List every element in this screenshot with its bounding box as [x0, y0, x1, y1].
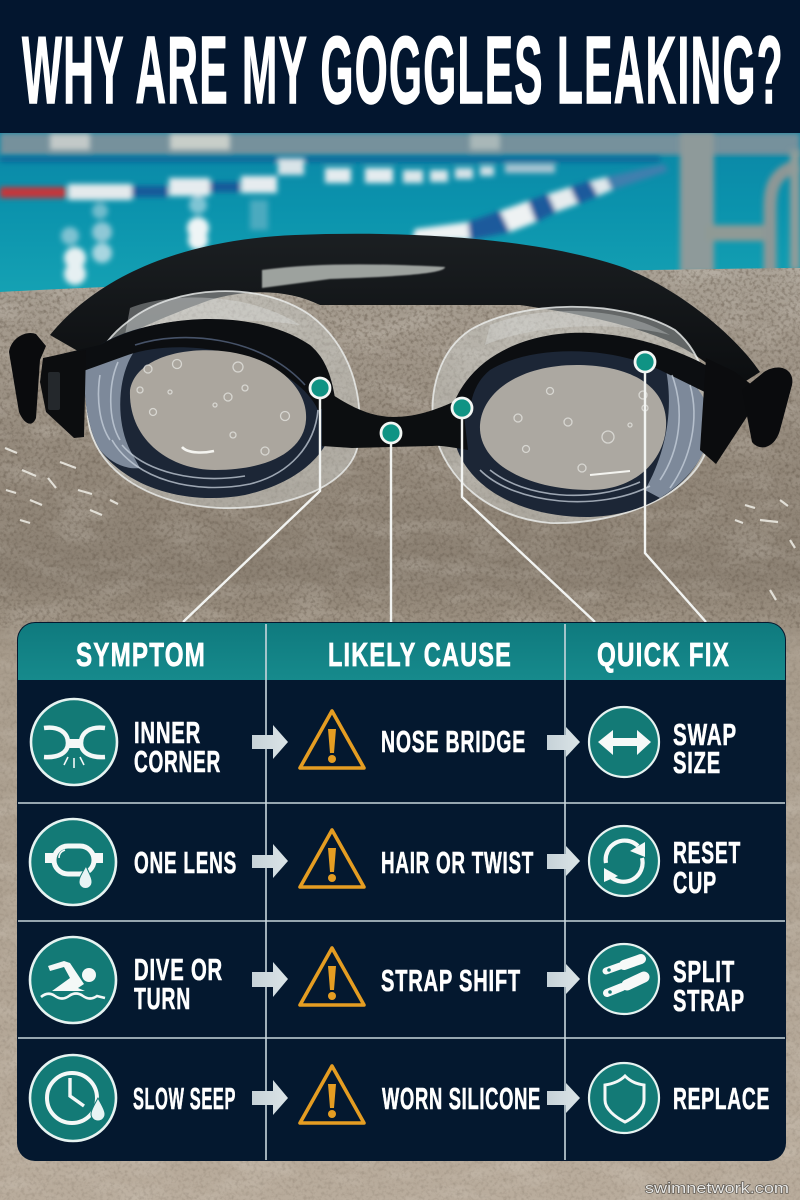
lane rope	[412, 164, 668, 240]
left buckle	[9, 333, 86, 438]
heading: symptom: SYMPTOM	[76, 636, 206, 673]
right lens	[432, 307, 735, 523]
icon: warning	[300, 830, 364, 887]
arrow	[252, 1080, 288, 1115]
right buckle	[700, 358, 792, 464]
text: dive or turn	[134, 952, 223, 1016]
text: swap size: SIZE	[673, 745, 721, 780]
left lens	[44, 291, 360, 508]
icon: slow seep	[30, 1055, 116, 1141]
arrow	[252, 962, 288, 997]
text: inner corner	[134, 715, 221, 779]
ladder	[680, 133, 800, 275]
heading: quick fix: QUICK FIX	[597, 636, 730, 673]
icon: reset cup	[589, 826, 659, 896]
text: dive or turn: DIVE OR	[134, 952, 223, 987]
callout lines	[183, 372, 706, 622]
icon: warning	[300, 711, 364, 768]
arrow	[547, 727, 580, 757]
text: strap shift: STRAP SHIFT	[381, 963, 521, 998]
text: reset cup	[673, 835, 741, 900]
icon: split strap	[589, 944, 659, 1014]
title band	[0, 0, 800, 133]
icon: warning	[300, 1066, 364, 1123]
text: nose bridge: NOSE BRIDGE	[381, 724, 526, 759]
text: hair or twist: HAIR OR TWIST	[381, 845, 534, 880]
text: swap size: SWAP	[673, 717, 737, 752]
watermark: swimnetwork.com	[645, 1180, 789, 1197]
text: inner corner: CORNER	[134, 744, 221, 779]
text: swap size	[673, 717, 737, 780]
arrow	[547, 1083, 580, 1113]
text: split strap	[673, 954, 745, 1018]
icon: dive or turn	[30, 937, 116, 1023]
icon: swap size	[589, 707, 659, 777]
icon: one lens	[30, 819, 116, 905]
arrow	[547, 846, 580, 876]
text: inner corner: INNER	[134, 715, 201, 750]
icon: warning	[300, 948, 364, 1005]
icon: inner corner	[31, 699, 117, 785]
arrow	[252, 844, 288, 878]
concrete deck	[0, 268, 800, 1200]
text: worn silicone: WORN SILICONE	[382, 1081, 541, 1116]
text: split strap: SPLIT	[673, 954, 735, 989]
icon: replace shield	[589, 1063, 659, 1133]
marker dots	[310, 352, 655, 443]
text: one lens: ONE LENS	[134, 845, 237, 880]
panel: symptom table	[17, 622, 786, 1161]
strap	[50, 234, 760, 388]
arrow	[547, 964, 580, 994]
nose bridge	[322, 388, 468, 450]
text: reset cup: CUP	[673, 865, 717, 900]
table header	[18, 623, 785, 680]
text: split strap: STRAP	[673, 983, 745, 1018]
arrow	[252, 725, 288, 759]
heading: likely cause: LIKELY CAUSE	[328, 636, 512, 673]
text: reset cup: RESET	[673, 835, 741, 870]
pool water background	[0, 133, 800, 303]
text: slow seep: SLOW SEEP	[133, 1081, 236, 1116]
text: dive or turn: TURN	[134, 981, 191, 1016]
